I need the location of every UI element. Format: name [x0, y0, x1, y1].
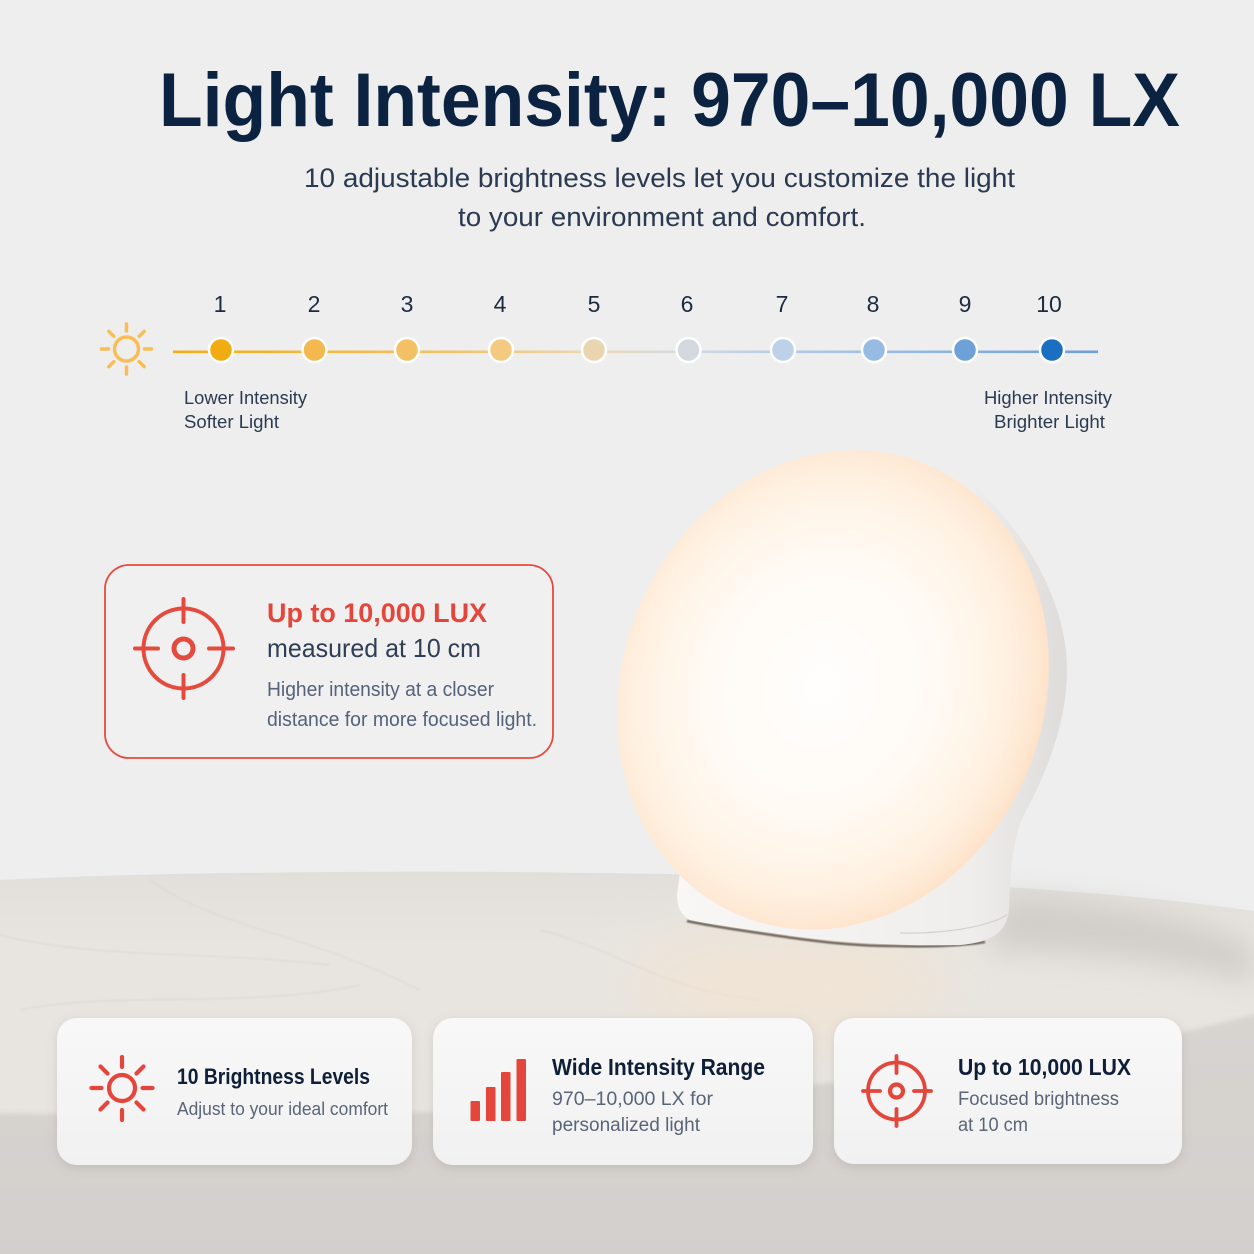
level numbers: 2: [308, 291, 320, 317]
level numbers: 9: [959, 291, 971, 317]
lamp: [546, 385, 1120, 995]
lamp shell and base: [677, 470, 1067, 945]
base groove: [900, 915, 1007, 933]
level numbers: 5: [588, 291, 600, 317]
level numbers: 6: [681, 291, 693, 317]
card text: [552, 1089, 714, 1136]
icon: sun: [92, 1057, 152, 1120]
title: Light Intensity: 970–10,000 LX: [159, 58, 1180, 143]
card heading: 10 Brightness Levels: [177, 1064, 370, 1089]
card text: at 10 cm: [958, 1115, 1028, 1136]
level numbers: 10: [1036, 291, 1062, 317]
callout: 10,000 lux: [105, 565, 553, 758]
low end label: Lower Intensity: [184, 388, 307, 408]
high end label: Higher Intensity: [984, 388, 1112, 408]
level numbers: 3: [401, 291, 413, 317]
callout subheading: measured at 10 cm: [267, 633, 481, 663]
level dots: [209, 338, 1064, 362]
scale line: [173, 350, 1098, 353]
marble table: [0, 872, 1254, 1254]
brightness level scale: [102, 291, 1112, 432]
level numbers: 7: [776, 291, 788, 317]
high end label: Brighter Light: [994, 412, 1105, 432]
icon: sun: [102, 324, 152, 374]
card text: Focused brightness: [958, 1089, 1119, 1110]
level numbers: 4: [494, 291, 507, 317]
card: brightness levels: [57, 1018, 412, 1165]
card heading: Up to 10,000 LUX: [958, 1054, 1132, 1080]
card text: 970–10,000 LX for: [552, 1089, 714, 1110]
icon: bars: [470, 1059, 526, 1121]
callout description: distance for more focused light.: [267, 709, 537, 731]
base contact shadow: [687, 921, 985, 946]
card text: [958, 1089, 1119, 1136]
callout description: [267, 679, 537, 731]
level numbers: 8: [867, 291, 879, 317]
low end label: Softer Light: [184, 412, 279, 432]
card: intensity range: [433, 1018, 813, 1165]
level numbers: [214, 291, 1062, 317]
low end label: [184, 388, 307, 432]
subtitle: [304, 163, 1016, 232]
high end label: [984, 388, 1112, 432]
subtitle: 10 adjustable brightness levels let you customize the light: [304, 163, 1016, 193]
card heading: Wide Intensity Range: [552, 1054, 765, 1080]
callout description: Higher intensity at a closer: [267, 679, 494, 701]
card text: personalized light: [552, 1115, 701, 1136]
card: 10,000 lux: [834, 1018, 1182, 1164]
icon: target: [863, 1056, 931, 1126]
icon: target: [135, 599, 233, 698]
card text: Adjust to your ideal comfort: [177, 1099, 388, 1119]
level numbers: 1: [214, 291, 226, 317]
subtitle: to your environment and comfort.: [458, 202, 866, 232]
glowing disc: [546, 385, 1120, 995]
callout heading: Up to 10,000 LUX: [267, 598, 487, 628]
